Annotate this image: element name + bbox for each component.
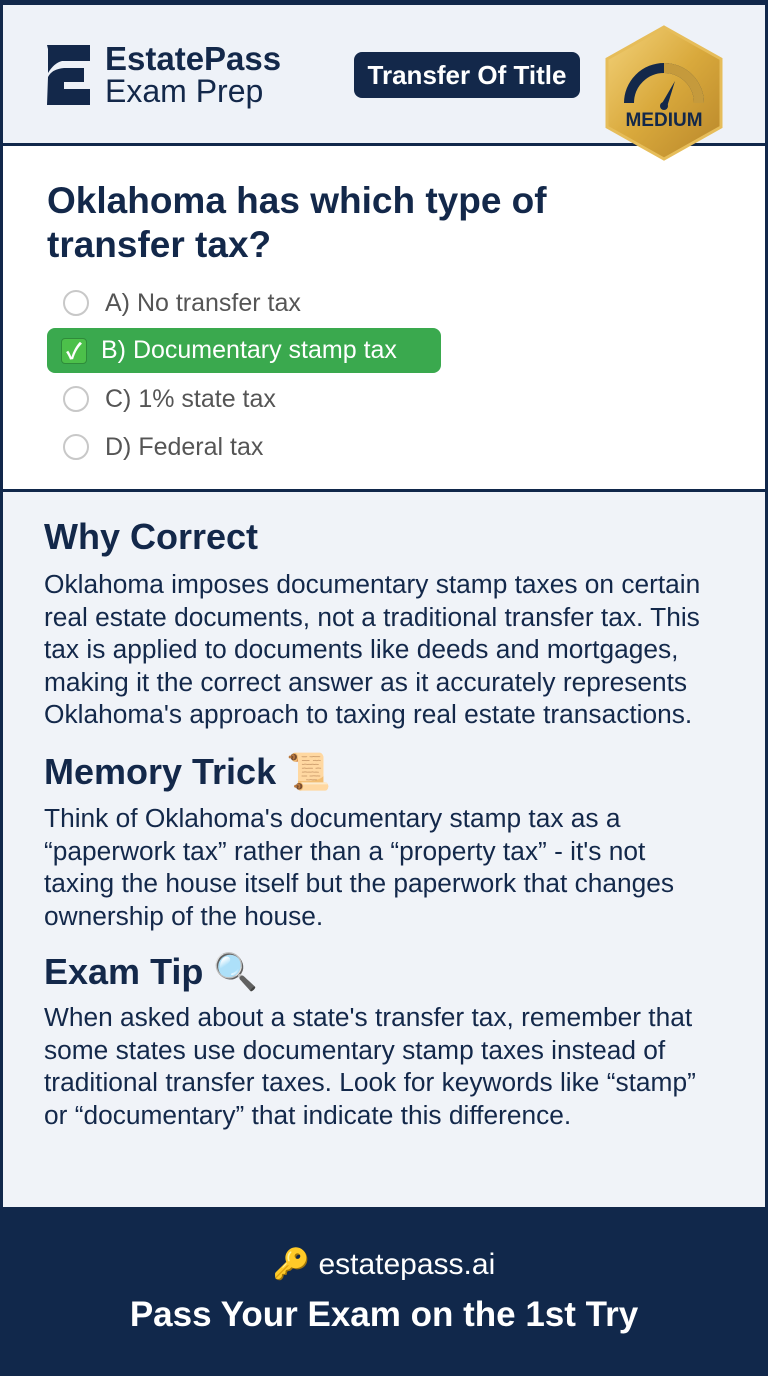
logo text: Exam Prep — [105, 73, 263, 109]
option B correct — [47, 328, 441, 373]
logo icon — [47, 45, 90, 105]
option C: C) 1% state tax — [105, 384, 276, 412]
difficulty badge: MEDIUM — [625, 110, 703, 131]
heading: why correct: Why Correct — [44, 516, 258, 557]
tagline: Pass Your Exam on the 1st Try — [130, 1295, 638, 1334]
topic pill — [354, 52, 580, 98]
difficulty badge — [606, 25, 722, 161]
option A: A) No transfer tax — [105, 288, 301, 316]
footer — [0, 1207, 768, 1376]
website: 🔑 estatepass.ai — [273, 1248, 495, 1281]
text: memory trick: Think of Oklahoma's documentary stamp tax as a “paperwork tax” rather than a “property tax” - it's not taxing the house itself but the paperwork that changes ownership of the house. — [44, 803, 674, 930]
heading: memory trick: Memory Trick 📜 — [44, 751, 331, 792]
question panel — [3, 146, 765, 489]
heading: exam tip: Exam Tip 🔍 — [44, 951, 258, 992]
logo text — [105, 40, 281, 109]
text: why correct: Oklahoma imposes documentary stamp taxes on certain real estate documents, not a traditional transfer tax. This tax is applied to documents like deeds and mortgages, making it the correct answer as it accurately represents Oklahoma's approach to taxing real estate transactions. — [44, 569, 700, 729]
question text: Oklahoma has which type of transfer tax? — [47, 180, 547, 265]
explanation panel — [3, 492, 765, 1207]
text: exam tip: When asked about a state's transfer tax, remember that some states use documentary stamp taxes instead of traditional transfer taxes. Look for keywords like “stamp” or “documentary” that indicate this difference. — [44, 1002, 696, 1130]
logo text: EstatePass — [105, 40, 281, 77]
header panel — [3, 5, 765, 143]
option D: D) Federal tax — [105, 432, 263, 460]
option B correct: ✓ — [66, 338, 82, 364]
option B correct: B) Documentary stamp tax — [101, 336, 397, 364]
topic pill: Transfer Of Title — [368, 60, 566, 90]
